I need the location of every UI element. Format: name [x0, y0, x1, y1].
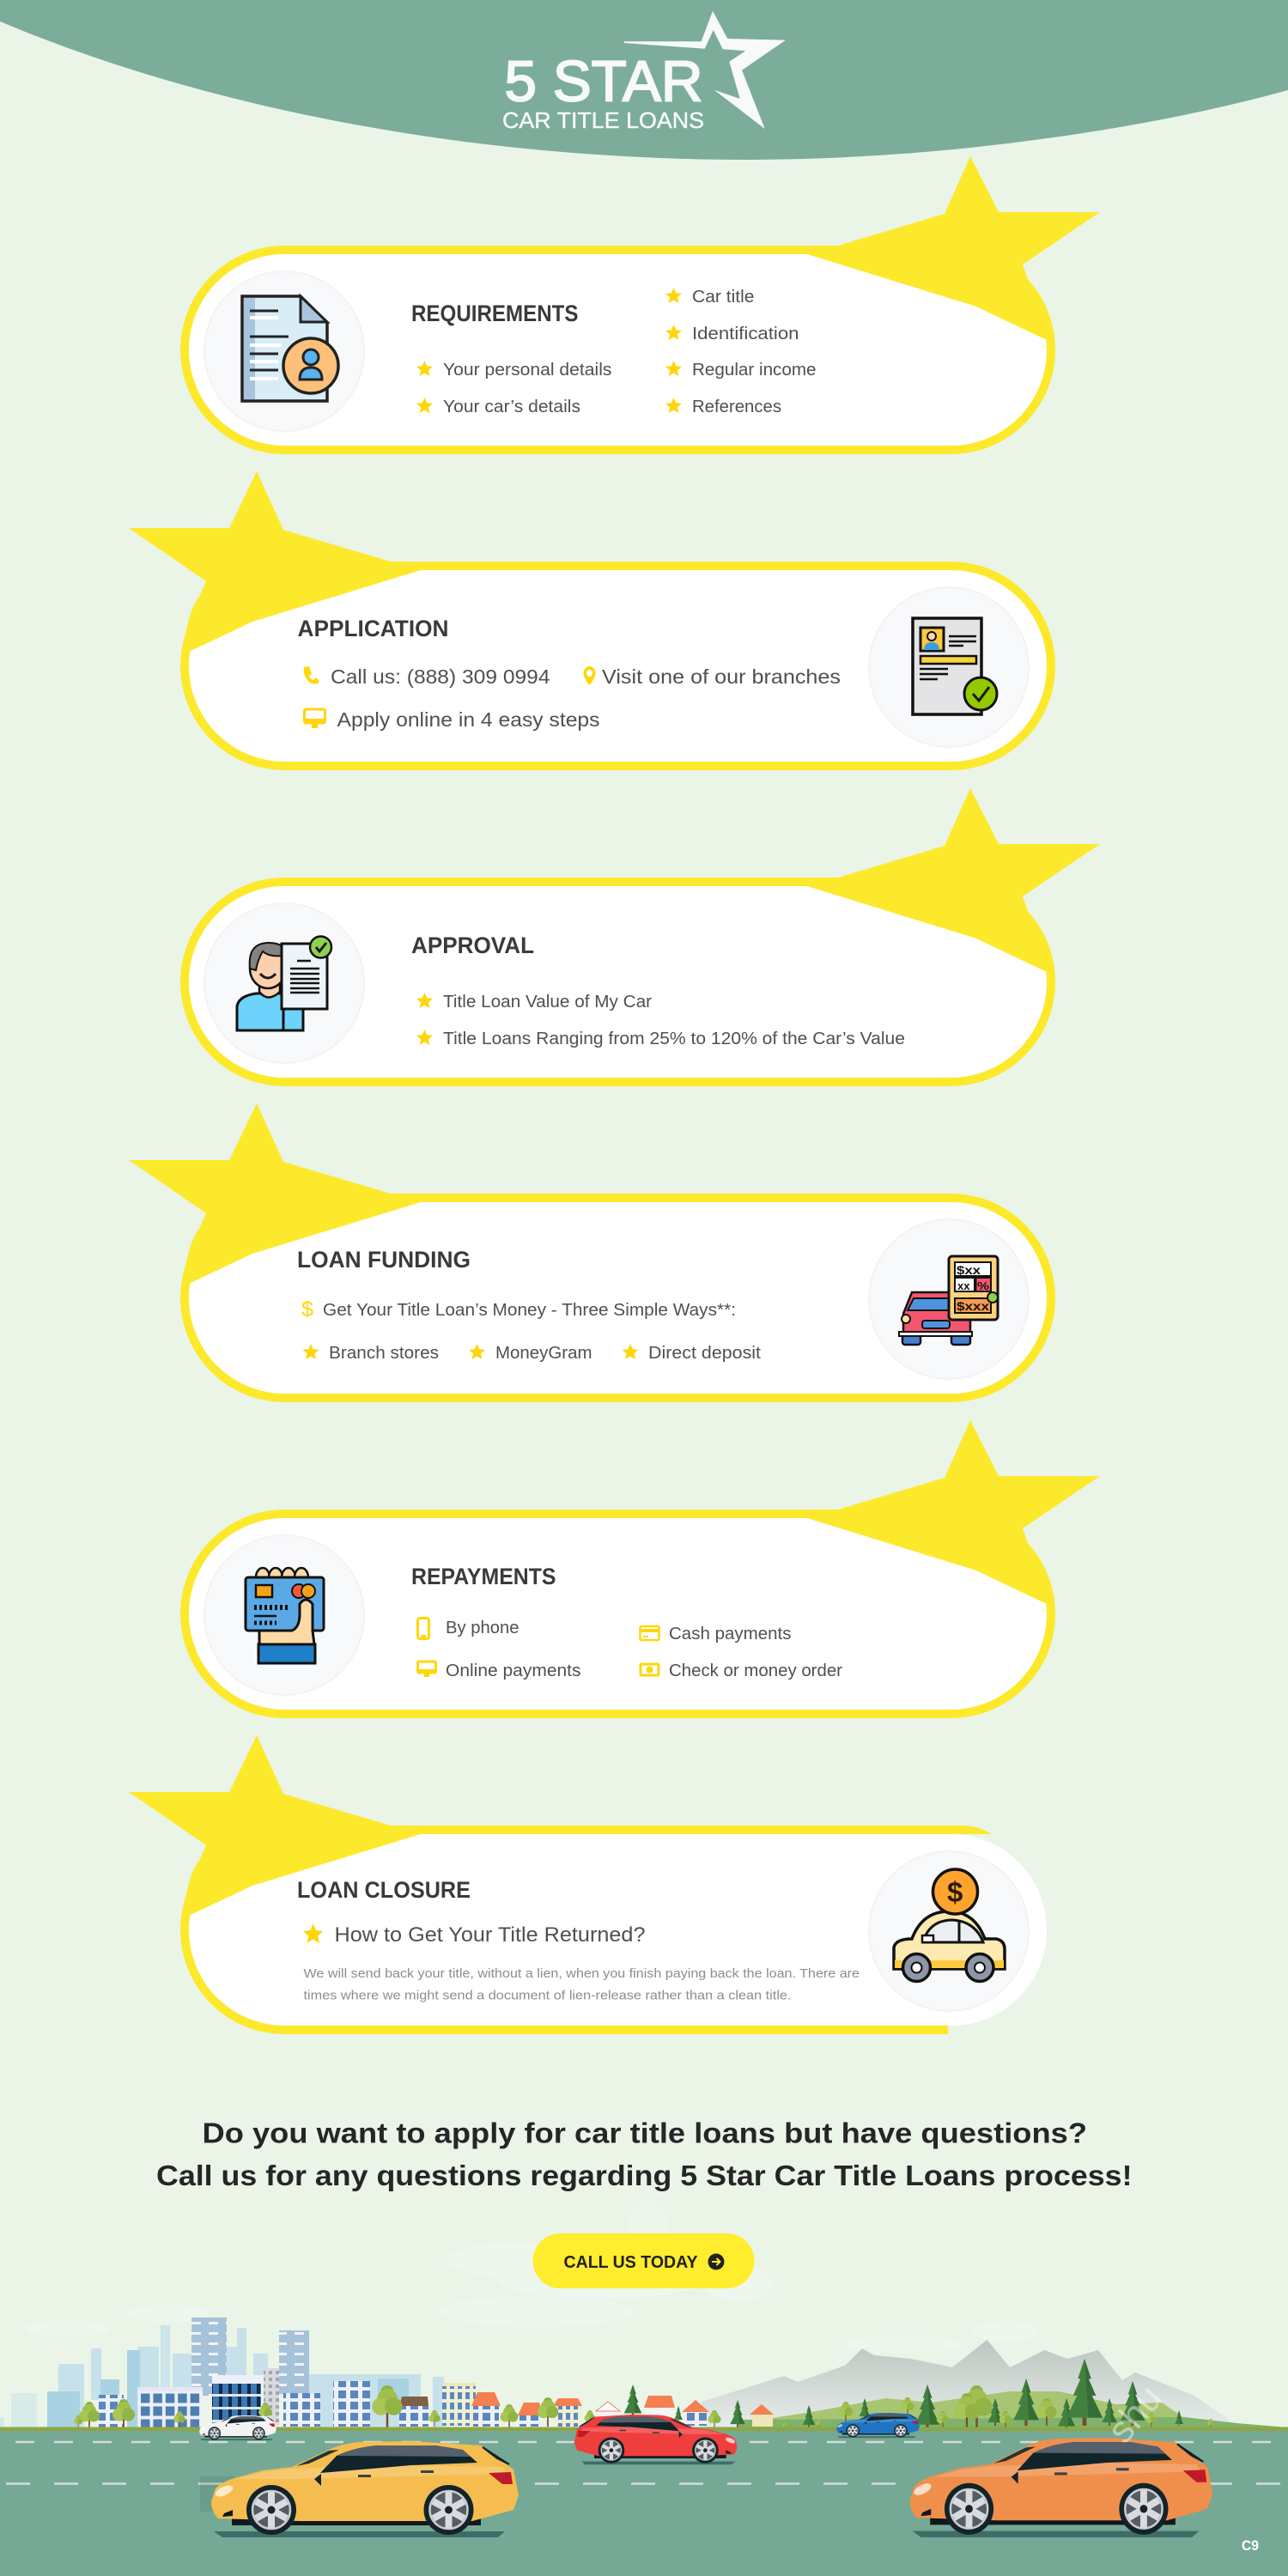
logo star — [624, 11, 786, 129]
text: cash payments: Cash payments — [669, 1625, 792, 1643]
subheading: How to Get Your Title Returned? — [335, 1923, 646, 1947]
list of approval points: Title Loan Value of My Car — [443, 993, 652, 1012]
illustration: mountains and hills — [702, 2340, 1288, 2427]
call to action text — [156, 2117, 1132, 2191]
text: call us: Call us: (888) 309 0994 — [331, 665, 550, 688]
illustration: road — [0, 2427, 1288, 2576]
icon circle, car and calculator: $xxx — [957, 1299, 989, 1313]
funding options: MoneyGram — [495, 1344, 592, 1363]
text: apply online: Apply online in 4 easy steps — [337, 708, 599, 731]
icon: monitor — [304, 709, 325, 728]
icon circle and id document — [869, 587, 1029, 747]
icon circle, car and calculator: % — [977, 1279, 990, 1292]
list of requirements: Identification — [692, 325, 799, 343]
heading: APPLICATION — [297, 616, 448, 641]
icon circle, car and coin — [869, 1851, 1029, 2011]
panel: requirements — [180, 156, 1100, 454]
icon: phone — [417, 1618, 429, 1638]
list of requirements: Regular income — [692, 361, 816, 380]
icon: phone — [304, 666, 319, 683]
text: three ways: Get Your Title Loan’s Money - Three Simple Ways**: — [323, 1301, 736, 1320]
heading: APPROVAL — [411, 933, 534, 958]
description — [304, 1966, 860, 2002]
panel: approval — [180, 788, 1100, 1086]
header with logo — [0, 0, 1288, 160]
heading: REQUIREMENTS — [411, 301, 579, 326]
panel: loan funding — [129, 1103, 1055, 1402]
car: red — [574, 2415, 737, 2464]
list of approval points — [416, 993, 905, 1048]
car: blue — [836, 2413, 920, 2438]
call to action text: Call us for any questions regarding 5 Star Car Title Loans process! — [156, 2160, 1132, 2191]
text: check or money order: Check or money order — [669, 1662, 842, 1680]
icon circle, car and calculator: xx — [957, 1279, 970, 1292]
icon circle, car and coin: $ — [947, 1876, 963, 1908]
clouds and sun — [27, 2198, 1038, 2353]
text: online payments: Online payments — [446, 1662, 580, 1680]
icon circle, hand and credit card — [204, 1535, 364, 1695]
watermark: shu — [1099, 2378, 1170, 2451]
panel: application — [129, 471, 1055, 770]
heading: LOAN FUNDING — [297, 1247, 471, 1273]
funding options — [302, 1344, 761, 1363]
list of requirements — [416, 288, 816, 416]
icon: banknote — [641, 1664, 659, 1675]
corner code: C9 — [1242, 2537, 1259, 2554]
funding options: Branch stores — [329, 1344, 439, 1363]
list of requirements: Your car’s details — [443, 398, 580, 416]
list of approval points: Title Loans Ranging from 25% to 120% of the Car’s Value — [443, 1030, 905, 1048]
icon circle and person with document — [204, 903, 364, 1063]
description: times where we might send a document of lien-release rather than a clean title. — [304, 1989, 792, 2002]
funding options: Direct deposit — [648, 1344, 761, 1363]
heading: LOAN CLOSURE — [297, 1877, 471, 1903]
heading: REPAYMENTS — [411, 1564, 556, 1589]
call to action text: Do you want to apply for car title loans but have questions? — [203, 2117, 1087, 2148]
icon: dollar: $ — [301, 1297, 313, 1321]
icon circle and document — [204, 271, 364, 431]
car: orange — [910, 2438, 1212, 2537]
logo text: 5 star: 5 STAR — [505, 50, 702, 113]
icon: monitor — [417, 1662, 436, 1677]
description: We will send back your title, without a lien, when you finish paying back the loan. There are — [304, 1966, 860, 1981]
text: by phone: By phone — [446, 1619, 519, 1637]
star bullet — [303, 1923, 323, 1943]
list of requirements: References — [692, 398, 781, 416]
icon circle, car and calculator — [869, 1219, 1029, 1379]
panel: repayments — [180, 1420, 1100, 1718]
icon: pin — [584, 666, 596, 685]
icon circle, car and calculator: $xx — [957, 1263, 981, 1277]
button: call us today — [532, 2233, 754, 2288]
logo text: car title loans: CAR TITLE LOANS — [502, 107, 704, 133]
illustration: city skyline — [0, 2318, 774, 2427]
panel: loan closure — [129, 1735, 1047, 2034]
list of requirements: Car title — [692, 288, 754, 307]
button: call us today: CALL US TODAY — [563, 2253, 698, 2272]
text: visit branches: Visit one of our branches — [602, 665, 841, 688]
icon: bank card — [640, 1626, 659, 1640]
illustration: trees — [74, 2359, 1214, 2430]
car: white — [199, 2415, 276, 2440]
car: yellow — [211, 2441, 519, 2537]
list of requirements: Your personal details — [443, 361, 611, 380]
